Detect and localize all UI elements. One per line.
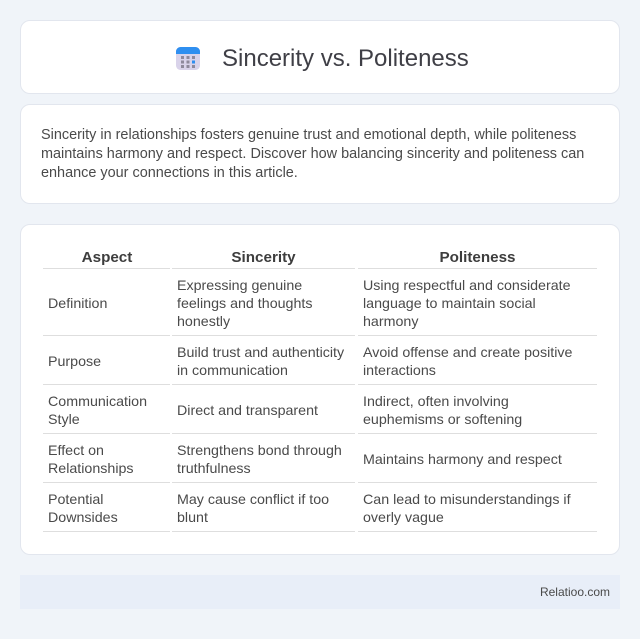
footer bar	[20, 575, 620, 609]
row: communication style: Indirect, often involving	[363, 394, 509, 410]
row: potential downsides: Can lead to misunderstandings if	[363, 492, 571, 508]
row: communication style: Communication	[48, 394, 147, 410]
intro text: enhance your connections in this article.	[41, 165, 298, 181]
intro text: maintains harmony and respect. Discover how balancing sincerity and politeness can	[41, 146, 584, 162]
row: definition: Using respectful and considerate	[363, 278, 571, 294]
row: effect on relationships: Effect on	[48, 443, 104, 459]
row: purpose: Avoid offense and create positive	[363, 345, 572, 361]
intro text: Sincerity in relationships fosters genuine trust and emotional depth, while politeness	[41, 127, 576, 143]
row: effect on relationships: Strengthens bond through	[177, 443, 342, 459]
row: definition: language to maintain social	[363, 296, 536, 312]
row: effect on relationships: Maintains harmony and respect	[363, 452, 562, 468]
row: potential downsides: Downsides	[48, 510, 118, 526]
row: potential downsides: blunt	[177, 510, 208, 526]
row: effect on relationships: truthfulness	[177, 461, 251, 477]
row: potential downsides	[43, 492, 597, 532]
table	[43, 249, 597, 532]
header panel	[20, 20, 620, 94]
row: purpose: in communication	[177, 363, 288, 379]
panel: comparison table	[20, 224, 620, 555]
row: communication style	[43, 394, 597, 434]
icon: calendar	[176, 47, 200, 70]
table header row: Sincerity	[231, 249, 296, 266]
footer credit: Relatioo.com	[540, 585, 610, 599]
row: potential downsides: Potential	[48, 492, 103, 508]
intro panel	[20, 104, 620, 204]
intro text	[41, 127, 584, 181]
title: Sincerity vs. Politeness	[222, 45, 469, 72]
row: definition: Definition	[48, 296, 107, 312]
row: effect on relationships: Relationships	[48, 461, 134, 477]
table header row	[43, 249, 597, 269]
row: definition: harmony	[363, 314, 418, 330]
row: potential downsides: overly vague	[363, 510, 444, 526]
row: communication style: euphemisms or softening	[363, 412, 522, 428]
row: purpose: interactions	[363, 363, 436, 379]
row: definition: honestly	[177, 314, 230, 330]
table header row: Politeness	[440, 249, 515, 266]
row: communication style: Style	[48, 412, 80, 428]
row: definition: Expressing genuine	[177, 278, 302, 294]
row: definition	[43, 278, 597, 336]
row: communication style: Direct and transparent	[177, 403, 318, 419]
row: purpose: Purpose	[48, 354, 101, 370]
row: purpose: Build trust and authenticity	[177, 345, 344, 361]
row: potential downsides: May cause conflict if too	[177, 492, 329, 508]
row: purpose	[43, 345, 597, 385]
table header row: Aspect	[82, 249, 132, 266]
row: definition: feelings and thoughts	[177, 296, 312, 312]
row: effect on relationships	[43, 443, 597, 483]
